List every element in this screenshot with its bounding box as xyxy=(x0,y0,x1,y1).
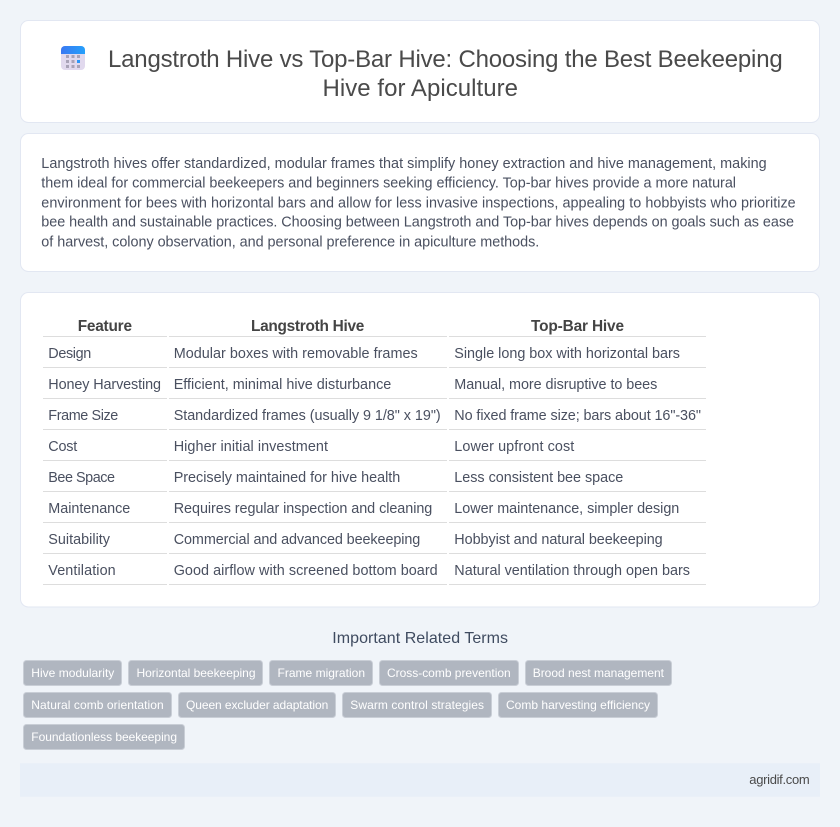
row: ventilation: Natural ventilation through open bars xyxy=(454,563,690,579)
row: frame size: No fixed frame size; bars about 16"-36" xyxy=(454,408,701,424)
tag: hive modularity xyxy=(24,660,122,686)
table header row: Top-Bar Hive xyxy=(531,318,624,335)
tag: cross-comb prevention xyxy=(380,660,518,686)
row: ventilation: Ventilation xyxy=(48,563,116,579)
panel: summary text xyxy=(20,134,820,272)
tag: horizontal beekeeping: Horizontal beekeeping xyxy=(136,666,256,680)
footer source: agridif.com xyxy=(749,772,810,787)
row: suitability: Commercial and advanced beekeeping xyxy=(174,532,420,548)
row: design: Modular boxes with removable frames xyxy=(174,346,418,362)
row: maintenance xyxy=(48,501,679,517)
row: honey harvesting: Manual, more disruptive to bees xyxy=(454,377,657,393)
tag: cross-comb prevention: Cross-comb prevention xyxy=(387,666,511,680)
tag: frame migration xyxy=(270,660,372,686)
tag: frame migration: Frame migration xyxy=(278,666,365,680)
row: maintenance: Lower maintenance, simpler design xyxy=(454,501,679,517)
tag: swarm control strategies: Swarm control strategies xyxy=(350,698,484,712)
text block: summary paragraph: them ideal for commercial beekeepers and beginners seeking efficiency. Top-bar hives provide a more natural xyxy=(41,176,736,192)
row: cost: Cost xyxy=(48,439,77,455)
row: frame size xyxy=(48,408,701,424)
tag: natural comb orientation xyxy=(24,692,172,718)
heading: important related terms: Important Related Terms xyxy=(332,630,508,647)
tag: brood nest management: Brood nest management xyxy=(533,666,665,680)
row: suitability: Suitability xyxy=(48,532,111,548)
tag: foundationless beekeeping: Foundationless beekeeping xyxy=(31,730,177,744)
footer bar xyxy=(20,763,820,797)
table header row: Feature xyxy=(78,318,132,335)
row: cost: Lower upfront cost xyxy=(454,439,574,455)
panel: title header xyxy=(20,20,820,122)
tag: natural comb orientation: Natural comb orientation xyxy=(31,698,164,712)
tag: horizontal beekeeping xyxy=(128,660,262,686)
text block: summary paragraph: bee health and sustainable practices. Choosing between Langstroth and Top-bar hives depends on goals such as ease xyxy=(41,214,794,230)
tag: hive modularity: Hive modularity xyxy=(31,666,114,680)
row: bee space: Precisely maintained for hive health xyxy=(174,470,400,486)
tag: swarm control strategies xyxy=(342,692,492,718)
row: honey harvesting: Honey Harvesting xyxy=(48,377,161,393)
tag: comb harvesting efficiency xyxy=(498,692,658,718)
text block: summary paragraph: of harvest, colony observation, and personal preference in apiculture methods. xyxy=(41,234,539,250)
row: suitability: Hobbyist and natural beekeeping xyxy=(454,532,663,548)
tag: queen excluder adaptation xyxy=(178,692,336,718)
row: maintenance: Maintenance xyxy=(48,501,130,517)
row: bee space: Less consistent bee space xyxy=(454,470,623,486)
title: Langstroth Hive vs Top-Bar Hive: Choosing the Best Beekeeping xyxy=(108,46,783,73)
row: honey harvesting: Efficient, minimal hive disturbance xyxy=(174,377,391,393)
text block: summary paragraph: Langstroth hives offer standardized, modular frames that simplify honey extraction and hive management, making xyxy=(41,156,767,172)
row: design: Single long box with horizontal bars xyxy=(454,346,680,362)
title xyxy=(108,46,783,102)
row: design: Design xyxy=(48,346,91,362)
table header row xyxy=(78,318,624,335)
text block: summary paragraph xyxy=(41,156,796,250)
row: suitability xyxy=(48,532,663,548)
row: maintenance: Requires regular inspection and cleaning xyxy=(174,501,432,517)
row: frame size: Standardized frames (usually 9 1/8" x 19") xyxy=(174,408,441,424)
row: bee space: Bee Space xyxy=(48,470,115,486)
title: Hive for Apiculture xyxy=(322,75,518,102)
row: cost xyxy=(48,439,574,455)
tag list: related terms xyxy=(24,660,672,750)
row: ventilation xyxy=(48,563,690,579)
text block: summary paragraph: environment for bees with horizontal bars and allow for less invasive inspections, appealing to hobbyists who prioritize xyxy=(41,196,796,212)
row: design xyxy=(48,346,680,362)
row: frame size: Frame Size xyxy=(48,408,118,424)
row: bee space xyxy=(48,470,623,486)
tag: foundationless beekeeping xyxy=(24,724,184,750)
panel: comparison table xyxy=(20,292,820,607)
row: honey harvesting xyxy=(48,377,657,393)
row: ventilation: Good airflow with screened bottom board xyxy=(174,563,438,579)
icon: calendar grid xyxy=(61,46,85,70)
tag: comb harvesting efficiency: Comb harvesting efficiency xyxy=(506,698,650,712)
row: cost: Higher initial investment xyxy=(174,439,328,455)
tag: brood nest management xyxy=(526,660,672,686)
table header row: Langstroth Hive xyxy=(251,318,365,335)
tag: queen excluder adaptation: Queen excluder adaptation xyxy=(186,698,328,712)
